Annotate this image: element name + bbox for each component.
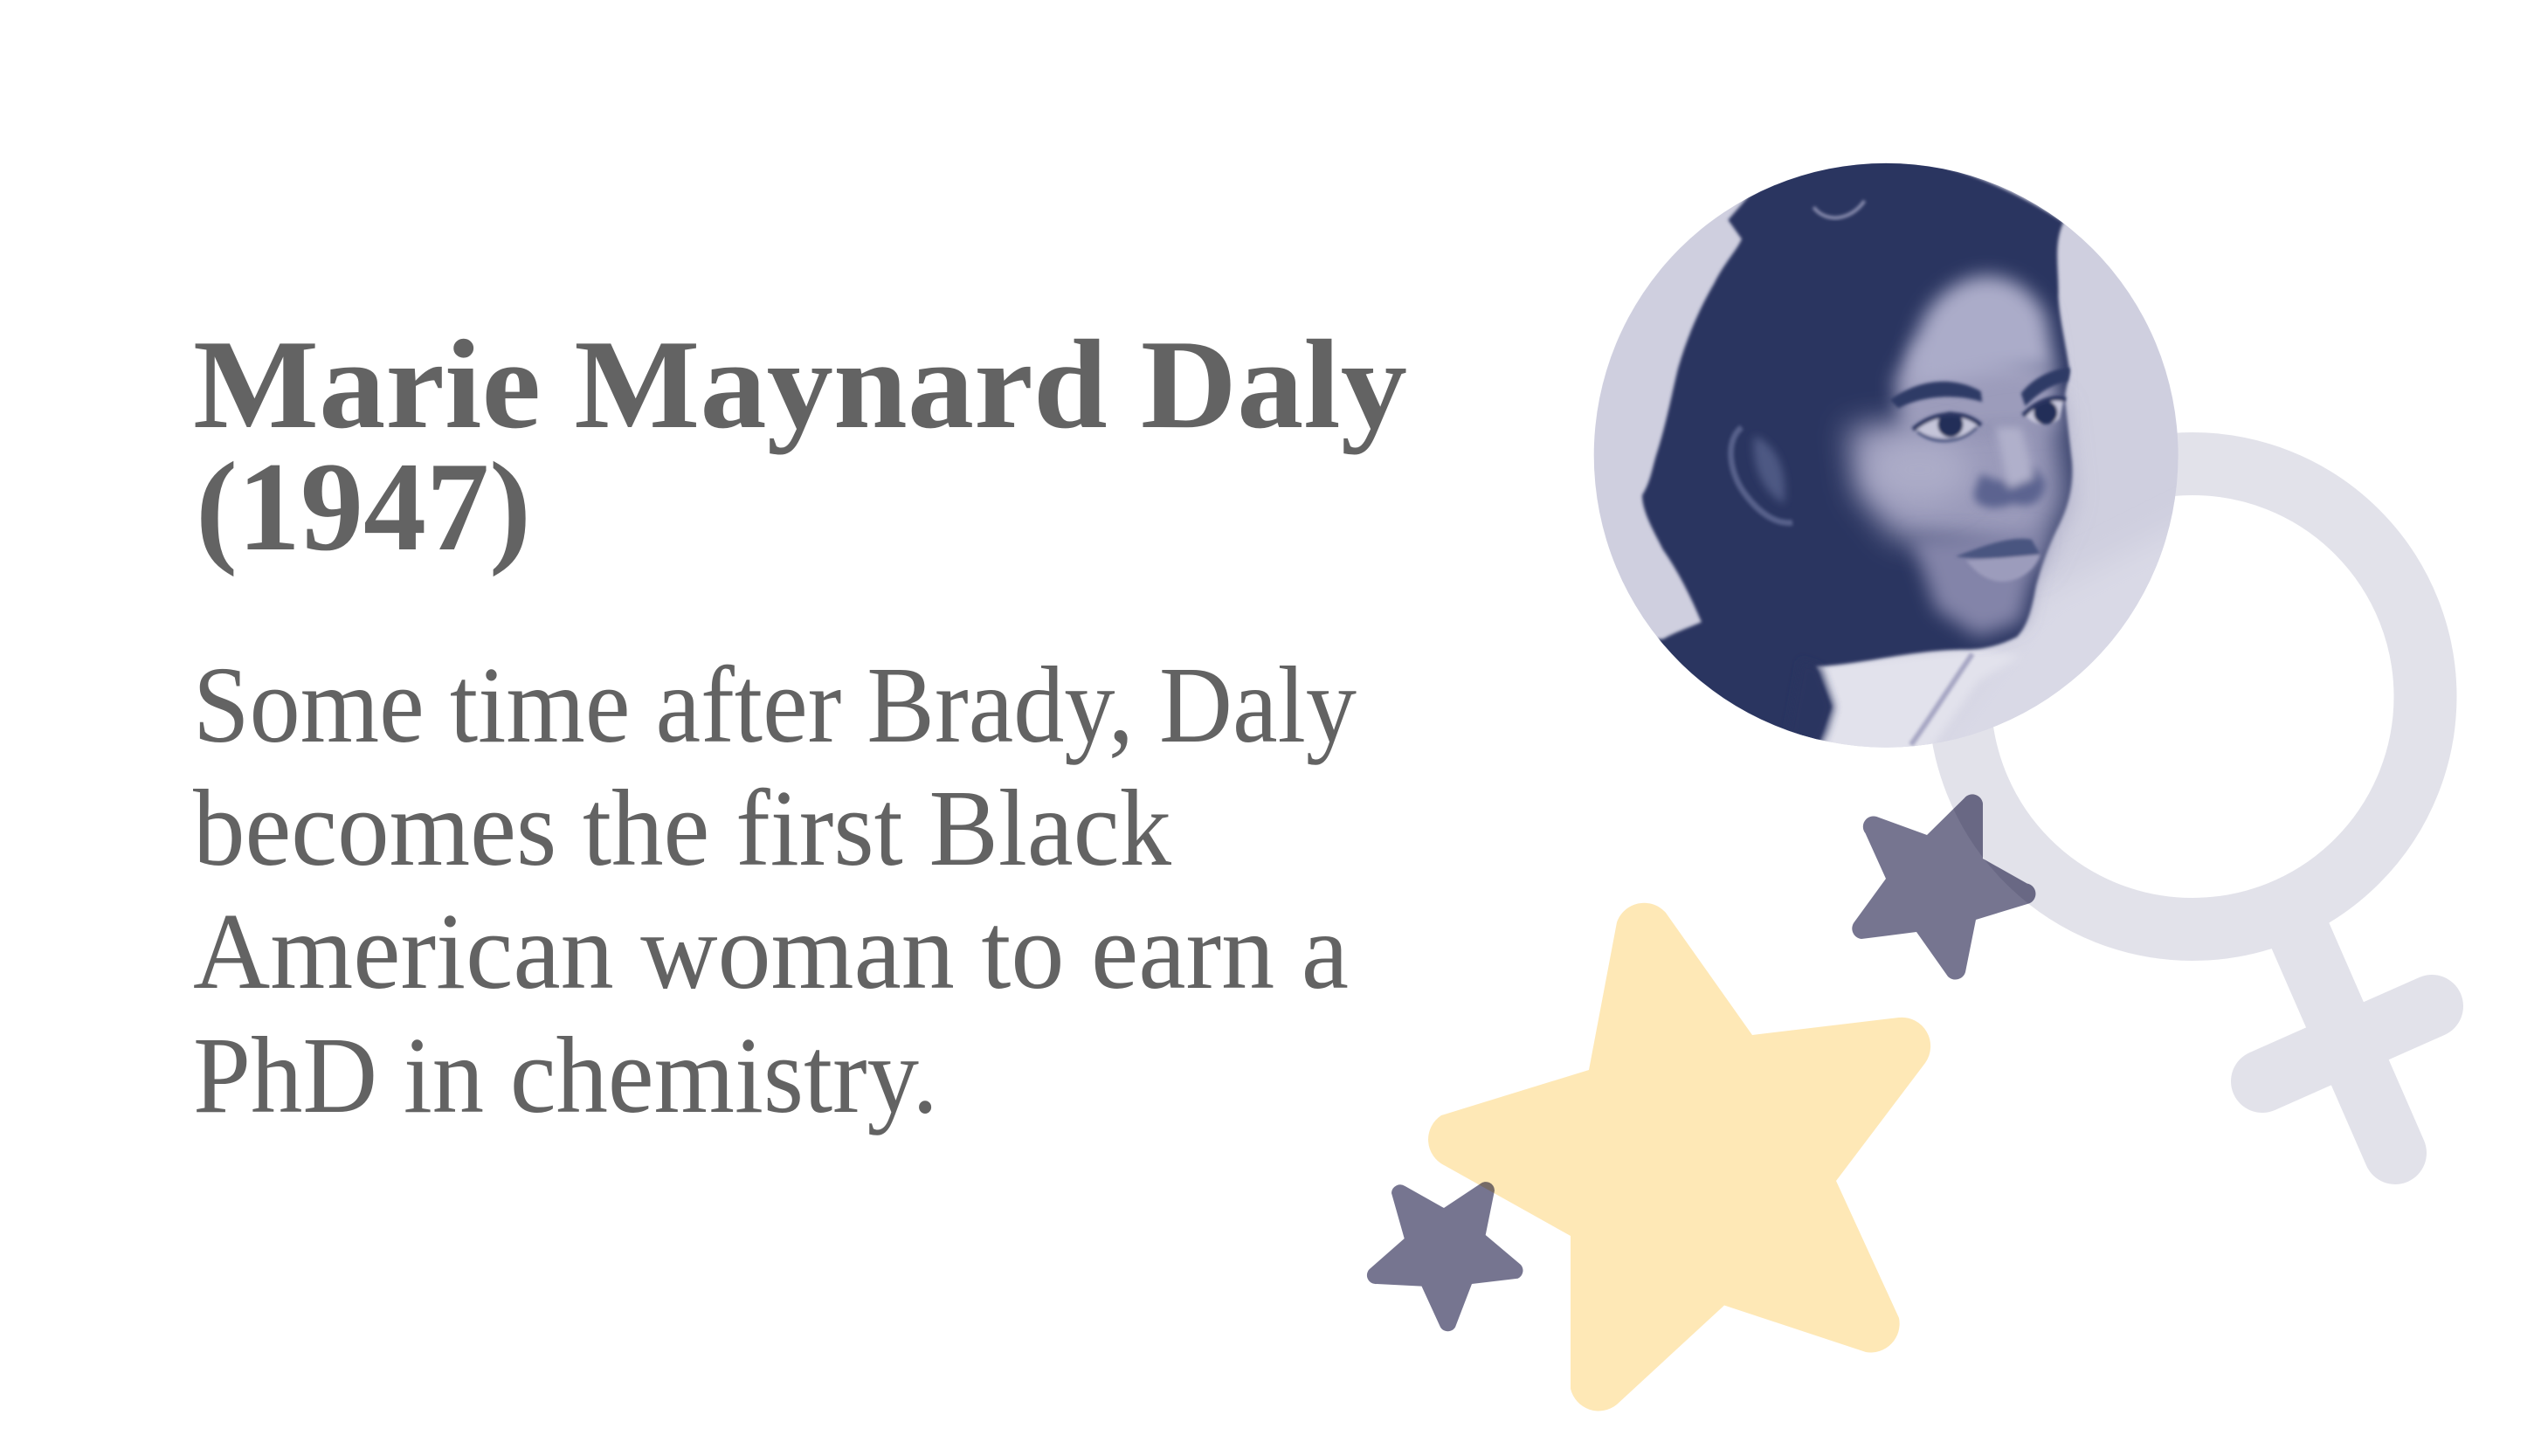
icon: female symbol (1960, 464, 2432, 1153)
lips (1956, 539, 2040, 582)
face: lower shading (1911, 533, 2042, 637)
face: forehead (1911, 276, 2055, 390)
title: Marie Maynard Daly (193, 314, 1407, 455)
face: cheek shading (1847, 406, 2066, 567)
cheek highlight (1868, 436, 1971, 504)
nose (1974, 427, 2046, 507)
face: temple (1894, 342, 2059, 436)
icon: small purple star at lower left (1367, 1182, 1523, 1331)
sweater (1820, 650, 2007, 748)
soft shoulder edge (1785, 665, 1840, 742)
body text: Some time after Brady, Daly (193, 645, 1357, 766)
body text: American woman to earn a (193, 892, 1349, 1012)
hair highlight curl (1813, 201, 1864, 217)
body text: becomes the first Black (193, 769, 1171, 889)
hair and head silhouette (1636, 156, 2072, 757)
icon: small purple star near ring (1852, 794, 2035, 980)
body text: PhD in chemistry. (193, 1016, 938, 1136)
infographic canvas (193, 162, 2463, 1411)
eyes (1913, 398, 2066, 441)
title (193, 314, 1407, 577)
title: (1947) (196, 436, 531, 577)
body text (193, 645, 1357, 1136)
photo background (1593, 162, 2179, 748)
collar line (1911, 654, 1972, 745)
portrait photo (1593, 162, 2179, 748)
ear (1731, 427, 1792, 523)
lower right lighter background (1950, 550, 2162, 741)
eyebrows (1890, 368, 2070, 408)
icon: large yellow star (1428, 903, 1930, 1411)
